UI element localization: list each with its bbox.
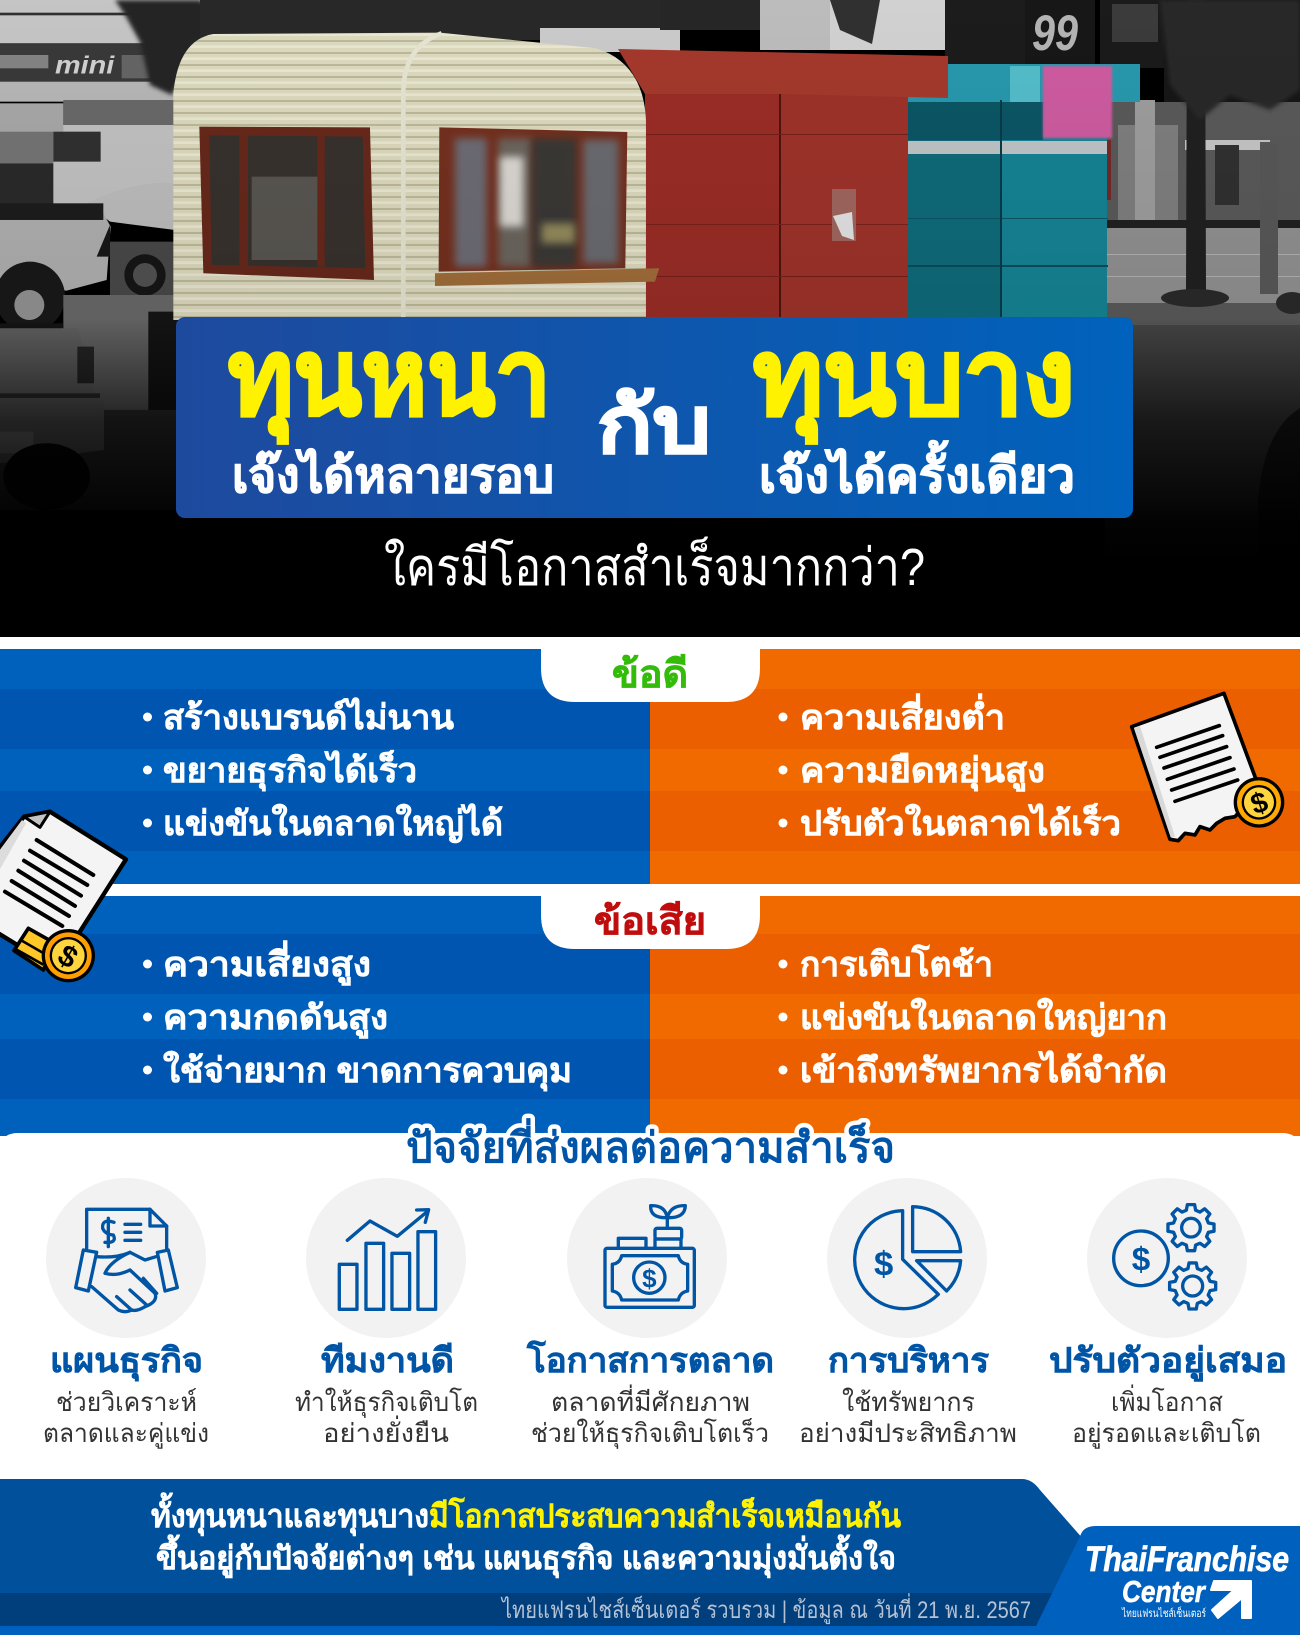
tree over the left building xyxy=(115,0,240,95)
icon: document with coins (left) xyxy=(0,812,126,982)
factor: keep adapting xyxy=(1049,1178,1287,1449)
tab: advantages heading: ข้อดี xyxy=(612,654,688,696)
top trees and signs xyxy=(200,0,1300,110)
right street scene xyxy=(1105,0,1300,560)
list: advantages thin capital: ปรับตัวในตลาดได้เร็ว xyxy=(800,802,1121,843)
conclusion line 1 xyxy=(151,1492,901,1537)
description: ตลาดที่มีศักยภาพ xyxy=(551,1384,750,1417)
icon: document with coins (left): $ xyxy=(52,938,83,976)
tab: disadvantages heading xyxy=(541,896,760,949)
top trees and signs: 99 xyxy=(1032,5,1078,61)
list: advantages thick capital xyxy=(143,697,503,844)
factor: market opportunity xyxy=(526,1178,774,1449)
list: advantages thin capital: ความเสี่ยงต่ำ xyxy=(800,693,1005,737)
icon: coin and gears: $ xyxy=(1132,1241,1151,1278)
icon: banknote with sprout: $ xyxy=(642,1264,657,1294)
icon: pie chart: $ xyxy=(874,1246,893,1284)
heading: success factors: ปัจจัยที่ส่งผลต่อความสำเร็จ xyxy=(406,1118,895,1171)
description: ช่วยวิเคราะห์ xyxy=(56,1387,197,1417)
red kiosk xyxy=(618,49,948,320)
cream kiosk xyxy=(173,33,659,320)
conclusion line 1: ทั้งทุนหนาและทุนบาง xyxy=(151,1492,429,1537)
subtitle left: เจ๊งได้หลายรอบ xyxy=(232,447,554,503)
name: แผนธุรกิจ xyxy=(50,1342,203,1382)
icon: handshake and document xyxy=(76,1209,177,1312)
name: ปรับตัวอยู่เสมอ xyxy=(1049,1342,1287,1382)
icon: banknote with sprout xyxy=(605,1206,694,1307)
logo: ThaiFranchise Center: ไทยแฟรนไชส์เซ็นเตอร์ xyxy=(1121,1606,1206,1620)
factor: management: อย่างมีประสิทธิภาพ xyxy=(799,1418,1017,1448)
panel: advantages xyxy=(0,649,1300,884)
tab: disadvantages heading: ข้อเสีย xyxy=(594,901,706,943)
factor: business plan: ตลาดและคู่แข่ง xyxy=(43,1418,209,1449)
logo: ThaiFranchise Center xyxy=(1036,1526,1300,1635)
list: disadvantages thick capital: ใช้จ่ายมาก ขาดการควบคุม xyxy=(163,1050,572,1092)
panel: disadvantages xyxy=(0,896,1300,1136)
conclusion line 1: มีโอกาสประสบความสำเร็จเหมือนกัน xyxy=(429,1496,901,1534)
left street scene xyxy=(0,0,207,510)
list: advantages thick capital: แข่งขันในตลาดใหญ่ได้ xyxy=(163,803,503,844)
panel: success factors xyxy=(0,1118,1300,1500)
list: disadvantages thick capital xyxy=(143,940,572,1092)
list: advantages thin capital: ความยืดหยุ่นสูง xyxy=(800,752,1045,792)
list: disadvantages thick capital: ความเสี่ยงสูง xyxy=(163,940,371,986)
description: ใช้ทรัพยากร xyxy=(842,1387,975,1417)
list: disadvantages thick capital: ความกดดันสูง xyxy=(163,999,388,1039)
subtitle right: เจ๊งได้ครั้งเดียว xyxy=(759,440,1075,503)
factor: business plan xyxy=(43,1178,209,1449)
title: versus: กับ xyxy=(597,381,711,469)
list: disadvantages thin capital: แข่งขันในตลาดใหญ่ยาก xyxy=(800,997,1167,1038)
title box xyxy=(176,317,1133,518)
title: thick capital: ทุนหนา xyxy=(228,319,551,444)
factor: keep adapting: อยู่รอดและเติบโต xyxy=(1072,1418,1261,1449)
conclusion line 2: ขึ้นอยู่กับปัจจัยต่างๆ เช่น แผนธุรกิจ และความมุ่งมั่นตั้งใจ xyxy=(156,1534,896,1579)
list: advantages thick capital: สร้างแบรนด์ไม่นาน xyxy=(163,697,454,737)
name: การบริหาร xyxy=(828,1342,990,1380)
list: advantages thin capital xyxy=(778,693,1121,843)
factor: market opportunity: ช่วยให้ธุรกิจเติบโตเร็ว xyxy=(531,1417,769,1449)
list: disadvantages thin capital xyxy=(778,944,1167,1090)
icon: rising bars xyxy=(339,1210,436,1309)
list: disadvantages thin capital: เข้าถึงทรัพยากรได้จำกัด xyxy=(800,1050,1167,1090)
title: thin capital: ทุนบาง xyxy=(753,319,1075,444)
factor: management xyxy=(799,1178,1017,1448)
icon: document with coin (right) xyxy=(1132,693,1284,841)
left window xyxy=(199,127,374,280)
factor: good team: อย่างยั่งยืน xyxy=(323,1415,449,1448)
hero photo: roadside kiosks xyxy=(0,0,1300,637)
list: advantages thick capital: ขยายธุรกิจได้เร็ว xyxy=(163,749,417,792)
source note: ไทยแฟรนไชส์เซ็นเตอร์ รวบรวม | ข้อมูล ณ วันที่ 21 พ.ย. 2567 xyxy=(500,1593,1031,1625)
icon: pie chart xyxy=(855,1207,961,1309)
name: ทีมงานดี xyxy=(321,1342,454,1380)
icon: coin and gears xyxy=(1114,1205,1216,1309)
list: disadvantages thin capital: การเติบโตช้า xyxy=(800,944,993,984)
description: เพิ่มโอกาส xyxy=(1111,1384,1223,1417)
icon: document with coin (right): $ xyxy=(1247,786,1272,821)
description: ทำให้ธุรกิจเติบโต xyxy=(295,1387,478,1418)
left street scene: mini xyxy=(55,51,115,79)
right window xyxy=(439,127,627,272)
counter xyxy=(435,268,659,286)
logo: ThaiFranchise Center: Center xyxy=(1122,1574,1207,1609)
name: โอกาสการตลาด xyxy=(526,1340,774,1380)
teal kiosk xyxy=(908,64,1140,320)
tab: advantages heading xyxy=(541,649,760,702)
dark overlay xyxy=(0,0,1300,637)
footer banner xyxy=(0,1479,1300,1635)
factor: good team xyxy=(295,1178,478,1448)
question: ใครมีโอกาสสำเร็จมากกว่า? xyxy=(384,537,925,597)
icon: arrow xyxy=(1211,1581,1251,1618)
